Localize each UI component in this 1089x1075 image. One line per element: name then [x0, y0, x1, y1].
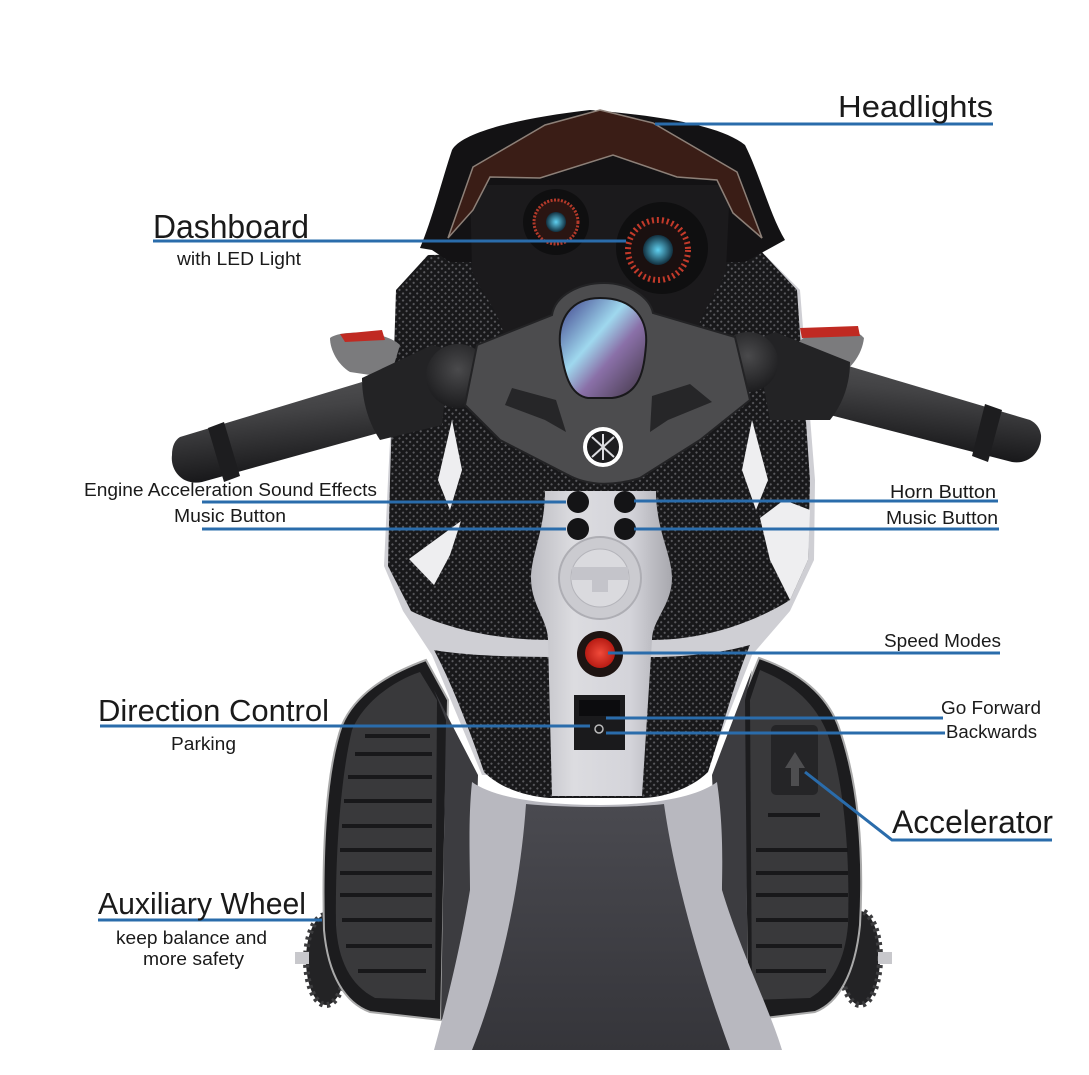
- label: auxiliary wheel: [98, 886, 322, 969]
- frame behind seat: [434, 670, 752, 1020]
- label: go forward: Go Forward: [941, 698, 1041, 718]
- label: speed modes: Speed Modes: [884, 631, 1001, 651]
- rear hood: [420, 110, 785, 262]
- right handlebar grip: [718, 332, 1041, 462]
- label: dashboard: [153, 208, 626, 269]
- headlight chevron: [448, 110, 762, 238]
- label: auxiliary wheel: more safety: [143, 949, 244, 969]
- large gauge: [616, 202, 708, 294]
- label: direction control: Parking: [171, 734, 236, 754]
- label: auxiliary wheel: Auxiliary Wheel: [98, 886, 306, 921]
- label: direction control: Direction Control: [98, 693, 329, 728]
- label: headlights: Headlights: [838, 89, 993, 124]
- label: dashboard: Dashboard: [153, 208, 309, 245]
- motorcycle illustration: [172, 110, 1041, 1050]
- logo badge: [583, 427, 623, 467]
- carbon fibre body: [388, 250, 810, 640]
- direction switch: [574, 695, 625, 750]
- left handlebar grip: [172, 344, 490, 483]
- side mirrors: [330, 326, 864, 378]
- left footrest: [324, 660, 448, 1020]
- handlebar centre console: [465, 283, 750, 484]
- body reflections: [409, 420, 810, 600]
- dashboard housing: [470, 185, 730, 340]
- label: horn button: Horn Button: [890, 482, 996, 502]
- label: engine acceleration sound effects: Engine Acceleration Sound Effects: [84, 480, 377, 500]
- red speed-mode button: [577, 631, 623, 677]
- silver centre panel: [531, 491, 672, 796]
- seat: [434, 782, 782, 1050]
- label: accelerator: Accelerator: [892, 804, 1053, 840]
- label: right music button: Music Button: [886, 508, 998, 528]
- label: backwards: Backwards: [946, 722, 1037, 742]
- lower carbon tank: [434, 645, 750, 798]
- label: auxiliary wheel: keep balance and: [116, 928, 267, 948]
- label: dashboard: with LED Light: [176, 249, 301, 269]
- right footrest: [742, 658, 861, 1020]
- label: left music button: Music Button: [174, 506, 286, 526]
- label: accelerator: [805, 772, 1053, 840]
- rear fairing wings: [384, 255, 815, 775]
- four control buttons: [567, 491, 636, 540]
- label: direction control: [98, 693, 590, 754]
- small gauge: [523, 189, 589, 255]
- auxiliary wheels: [295, 911, 892, 1005]
- fuel cap: [559, 537, 641, 619]
